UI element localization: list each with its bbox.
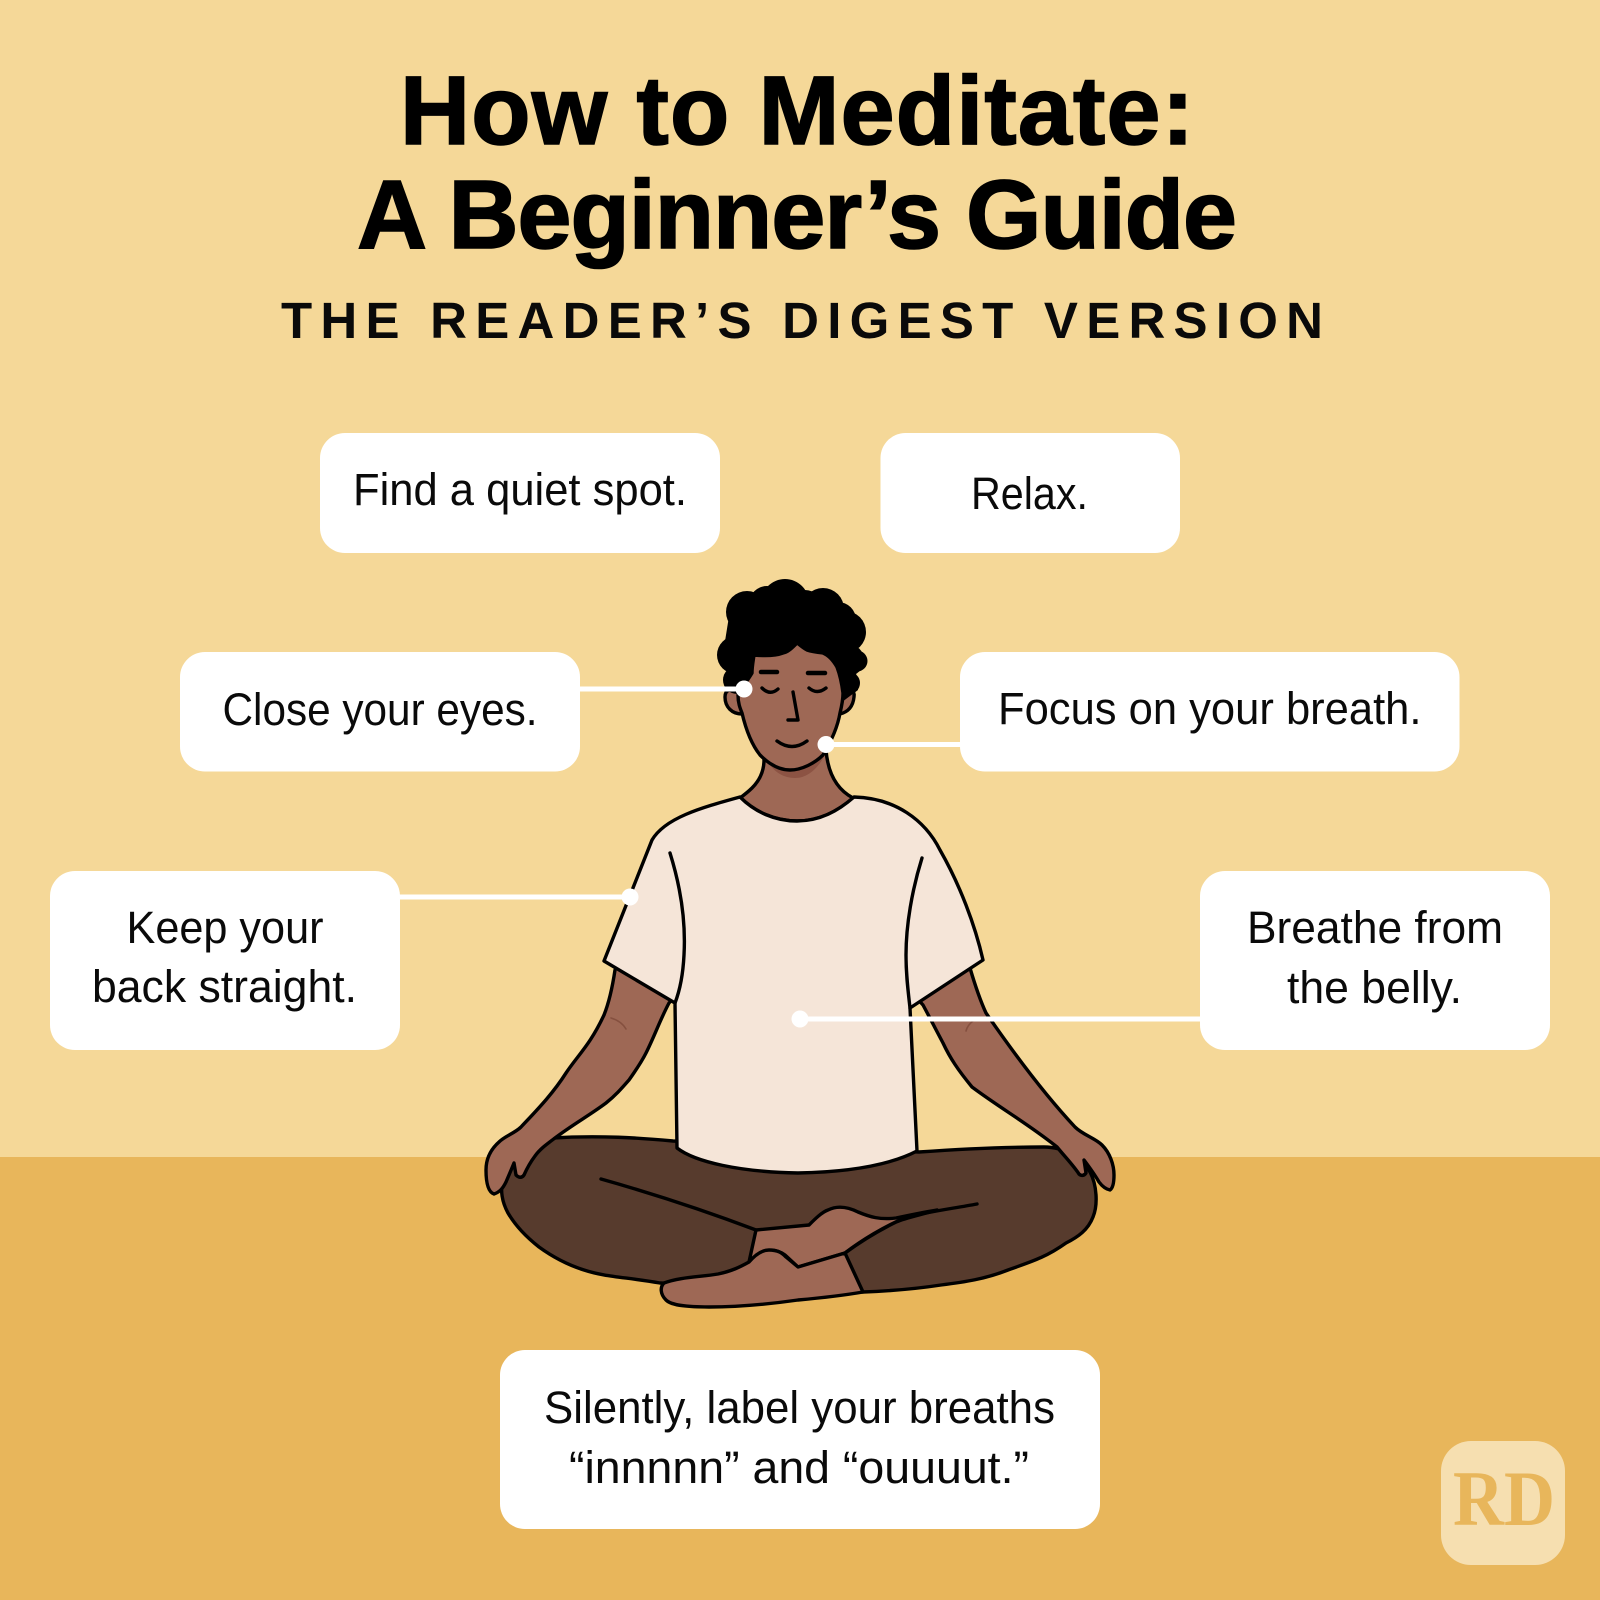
title: A Beginner’s Guide xyxy=(357,160,1237,269)
callout: breathe from the belly: the belly. xyxy=(1287,962,1462,1013)
callout: focus on your breath xyxy=(818,652,1460,772)
sleeve seams xyxy=(670,853,922,1008)
title xyxy=(357,56,1237,269)
illustration: meditating person xyxy=(486,579,1114,1307)
lower foot and shin xyxy=(661,1250,863,1307)
ears xyxy=(725,688,854,714)
elbow creases xyxy=(611,1018,973,1031)
facial features xyxy=(761,672,826,746)
title: How to Meditate: xyxy=(400,56,1194,165)
face xyxy=(738,643,843,770)
t-shirt xyxy=(604,797,983,1173)
callout: focus on your breath: Focus on your breath. xyxy=(998,683,1422,734)
subtitle: THE READER’S DIGEST VERSION xyxy=(281,292,1323,349)
callout box: relax: Relax. xyxy=(971,468,1088,519)
callout box: relax xyxy=(880,433,1180,553)
callout: label your breaths xyxy=(500,1350,1100,1529)
leg crease lines xyxy=(601,1179,977,1253)
callout: breathe from the belly: Breathe from xyxy=(1247,902,1503,953)
legs: crossed trousers xyxy=(502,1137,1096,1292)
left arm and hand xyxy=(486,950,690,1194)
callout: close your eyes: Close your eyes. xyxy=(222,684,538,735)
callout: keep your back straight: back straight. xyxy=(92,961,357,1012)
logo: RD badge: RD xyxy=(1453,1455,1555,1542)
callout box: find a quiet spot xyxy=(320,433,720,553)
neck shadow xyxy=(765,755,825,778)
logo: RD badge xyxy=(1441,1441,1565,1565)
hair xyxy=(717,579,868,702)
callout: close your eyes xyxy=(180,652,752,772)
callout: label your breaths: “innnnn” and “ouuuut.” xyxy=(569,1442,1029,1493)
upper foot xyxy=(749,1207,937,1267)
neck xyxy=(740,750,853,821)
callout box: find a quiet spot: Find a quiet spot. xyxy=(353,464,687,515)
callout: keep your back straight: Keep your xyxy=(126,902,324,953)
callout: keep your back straight xyxy=(50,871,638,1050)
right arm and hand xyxy=(905,945,1114,1190)
callout: breathe from the belly xyxy=(792,871,1550,1050)
callout: label your breaths: Silently, label your breaths xyxy=(544,1382,1055,1433)
